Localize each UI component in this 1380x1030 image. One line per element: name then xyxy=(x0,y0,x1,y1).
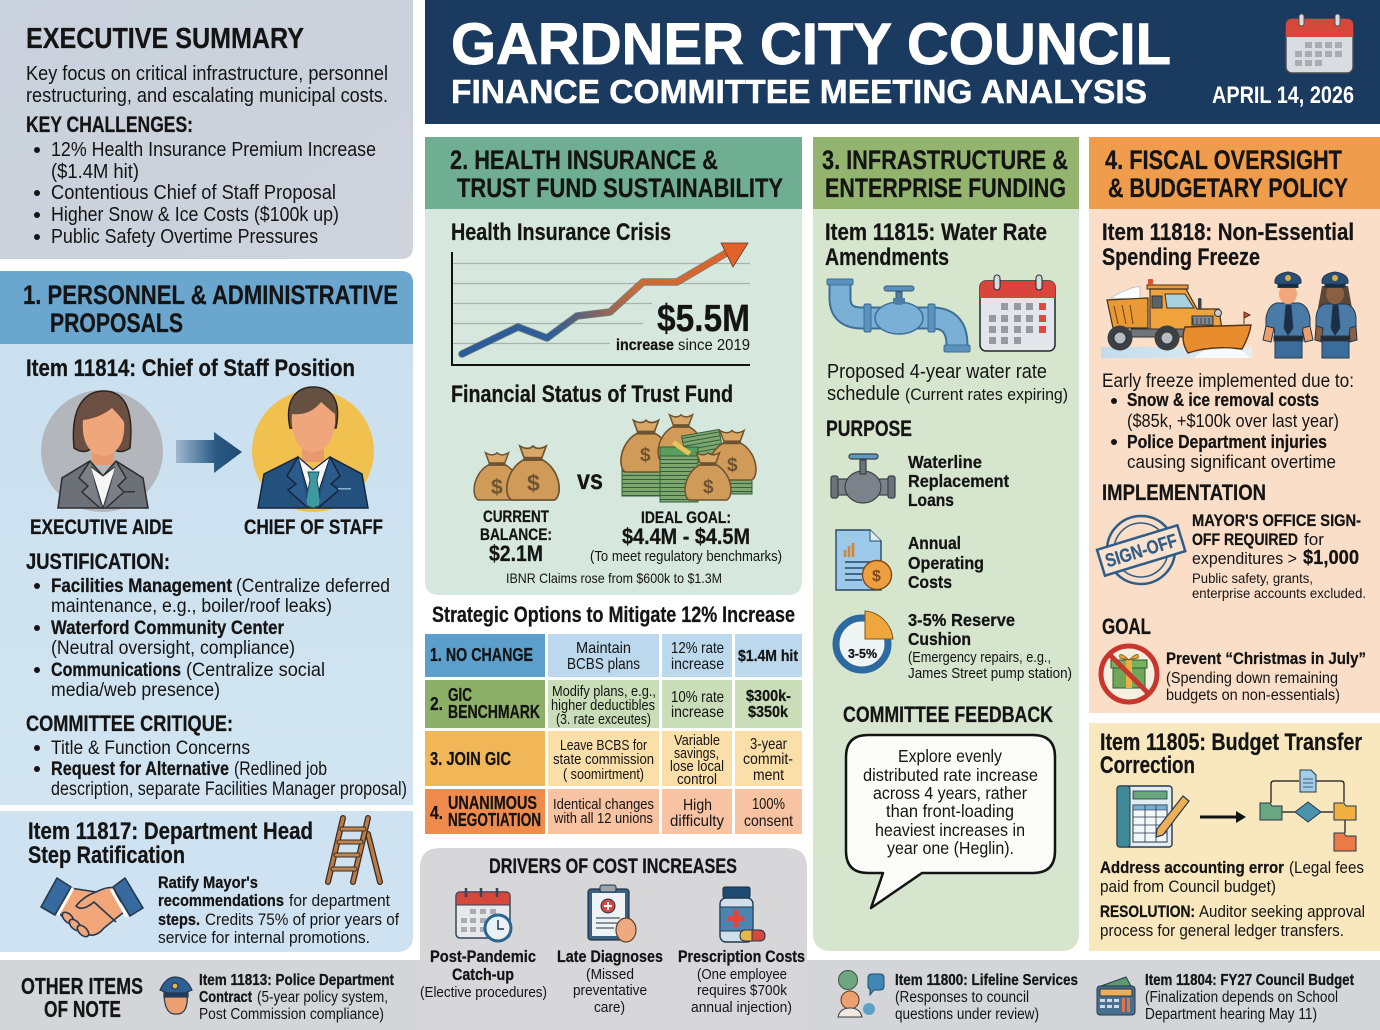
icon: snow plow truck xyxy=(1101,279,1252,358)
freeze reasons text xyxy=(1102,371,1354,472)
icon: goal money bags and cash: $ xyxy=(727,455,738,476)
row 1: no change: increase xyxy=(671,656,724,673)
critique list: Request for Alternative xyxy=(51,758,229,780)
freeze reasons text: Snow & ice removal costs xyxy=(1127,390,1319,410)
icon: sign-off stamp xyxy=(1097,516,1185,584)
label: ideal goal xyxy=(590,508,782,565)
icon: current money bags: $ xyxy=(491,476,503,499)
driver: prescription costs: annual injection) xyxy=(691,999,792,1016)
heading: item 11818 xyxy=(1102,219,1354,271)
label: current balance: BALANCE: xyxy=(480,525,552,544)
implementation text xyxy=(1192,511,1366,601)
purpose: annual operating costs: Costs xyxy=(908,572,952,592)
section header 1: 1. PERSONNEL & ADMINISTRATIVE xyxy=(23,280,398,310)
panel: 3 infrastructure and enterprise funding xyxy=(813,137,1079,951)
purpose: waterline replacement loans: Waterline xyxy=(908,452,982,472)
heading: other items of note: OTHER ITEMS xyxy=(21,973,143,999)
heading: goal: GOAL xyxy=(1102,614,1151,639)
icon: ledger and pencil xyxy=(1117,786,1189,847)
row 4: unanimous negotiation: NEGOTIATION xyxy=(448,810,541,830)
section header 3: 3. INFRASTRUCTURE & xyxy=(822,145,1068,175)
justification list: (Centralize deferred xyxy=(236,575,390,597)
row 2: GIC benchmark: GIC xyxy=(448,685,472,705)
row 1: no change: 12% rate xyxy=(671,640,724,657)
driver: late diagnoses xyxy=(557,948,663,1016)
subtitle: FINANCE COMMITTEE MEETING ANALYSIS xyxy=(451,73,1147,110)
critique list xyxy=(34,737,407,800)
resolution text: Auditor seeking approval xyxy=(1199,903,1365,921)
row 3: join GIC: control xyxy=(677,772,717,788)
icon: corrected workflow xyxy=(1260,770,1356,851)
other item 11813: (5-year policy system, xyxy=(257,989,388,1006)
driver: late diagnoses: care) xyxy=(594,999,625,1016)
row 2: GIC benchmark: BENCHMARK xyxy=(448,702,540,722)
chart callout caption: since 2019 xyxy=(678,337,750,354)
other item 11804: Department hearing May 11) xyxy=(1145,1006,1317,1023)
chart callout caption: increase xyxy=(616,337,674,354)
label: current balance: $2.1M xyxy=(489,541,543,566)
icon: goal money bags and cash: $ xyxy=(703,477,714,498)
icon: current money bags xyxy=(474,446,559,500)
description text: recommendations xyxy=(158,891,284,910)
row 3: join GIC: state commission xyxy=(553,751,654,768)
icon: sign-off stamp: SIGN-OFF xyxy=(1103,531,1180,572)
row 2: GIC benchmark: $350k xyxy=(748,704,788,721)
freeze reasons text: Police Department injuries xyxy=(1127,432,1327,452)
row 1: no change: 1. NO CHANGE xyxy=(430,645,533,665)
callout: committee feedback speech bubble: heaviest increases in xyxy=(875,820,1025,840)
icon: current money bags: $ xyxy=(527,470,540,496)
driver: late diagnoses: Late Diagnoses xyxy=(557,948,663,966)
icon: prescription bottle xyxy=(720,887,765,942)
purpose: annual operating costs: Operating xyxy=(908,553,984,573)
row 4: unanimous negotiation: High xyxy=(683,797,712,814)
summary text: Key focus on critical infrastructure, personnel xyxy=(26,63,388,85)
row 3: join GIC: Variable xyxy=(674,733,720,749)
heading: committee critique: COMMITTEE CRITIQUE: xyxy=(26,711,233,736)
implementation text: for xyxy=(1304,530,1324,549)
description text xyxy=(158,873,399,947)
heading: purpose: PURPOSE xyxy=(826,416,912,441)
label: current balance: CURRENT xyxy=(483,507,549,526)
other item 11813: Contract xyxy=(199,989,252,1006)
section header 1: PROPOSALS xyxy=(50,308,183,338)
heading: item 11815: Item 11815: Water Rate xyxy=(825,219,1047,246)
row 4: unanimous negotiation: difficulty xyxy=(670,813,724,830)
row 1: no change: $1.4M hit xyxy=(738,648,799,665)
critique list: description, separate Facilities Manager proposal) xyxy=(51,778,407,800)
heading: other items of note xyxy=(21,973,143,1022)
row 2: GIC benchmark: increase xyxy=(671,704,724,721)
icon: no gifts xyxy=(1101,646,1157,702)
water rate description: Proposed 4-year water rate xyxy=(827,361,1047,383)
driver: post-pandemic catch-up: Post-Pandemic xyxy=(430,948,536,966)
label: chief of staff: CHIEF OF STAFF xyxy=(244,516,383,539)
other item 11813 xyxy=(199,972,394,1023)
heading: item 11815 xyxy=(825,219,1047,271)
row 2: GIC benchmark: Modify plans, e.g., xyxy=(552,683,656,700)
line chart: premium increases xyxy=(452,243,750,365)
section header 2: TRUST FUND SUSTAINABILITY xyxy=(457,173,783,203)
purpose: annual operating costs xyxy=(908,533,984,592)
key challenges list: 12% Health Insurance Premium Increase xyxy=(51,139,376,161)
icon: lifeline services people chat xyxy=(838,970,884,1017)
driver: post-pandemic catch-up xyxy=(420,948,547,1001)
arrow: ledger to workflow xyxy=(1200,811,1246,823)
implementation text: expenditures > xyxy=(1192,549,1297,568)
accounting error text xyxy=(1100,859,1364,896)
comparison label: vs: vs xyxy=(577,464,603,495)
heading: health insurance crisis: Health Insurance Crisis xyxy=(451,219,671,246)
bottom strip: other items background xyxy=(0,960,1380,1030)
arrow: aide to chief xyxy=(176,432,242,473)
heading: item 11815: Amendments xyxy=(825,244,949,271)
driver: prescription costs: (One employee xyxy=(697,966,787,983)
row 2: GIC benchmark xyxy=(425,680,802,728)
description text: steps. xyxy=(158,910,200,929)
key challenges list: Higher Snow & Ice Costs ($100k up) xyxy=(51,204,339,226)
goal text: budgets on non-essentials) xyxy=(1166,687,1340,704)
implementation text: OFF REQUIRED xyxy=(1192,530,1298,549)
panel: drivers of cost increases xyxy=(420,848,807,1030)
heading: other items of note: OF NOTE xyxy=(44,996,121,1022)
key challenges list: Public Safety Overtime Pressures xyxy=(51,226,318,248)
heading: executive summary: EXECUTIVE SUMMARY xyxy=(26,23,304,55)
key challenges list xyxy=(34,139,376,248)
panel: 1 personnel and administrative proposals xyxy=(0,271,413,805)
section header 1 xyxy=(0,271,413,344)
purpose: waterline replacement loans: Loans xyxy=(908,490,954,510)
justification list: media/web presence) xyxy=(51,679,220,701)
justification list xyxy=(34,575,390,701)
purpose: annual operating costs: Annual xyxy=(908,533,961,553)
other item 11804 xyxy=(1145,972,1354,1023)
section header 2 xyxy=(425,137,802,209)
key challenges list: ($1.4M hit) xyxy=(51,161,139,183)
row 1: no change: BCBS plans xyxy=(567,656,640,673)
row 4: unanimous negotiation: with all 12 unions xyxy=(553,810,653,827)
chart callout caption xyxy=(616,337,750,354)
purpose: reserve cushion: (Emergency repairs, e.g., xyxy=(908,650,1051,666)
justification list: Communications xyxy=(51,659,181,681)
row 3: join GIC: 3-year xyxy=(750,736,788,753)
heading: strategic options: Strategic Options to Mitigate 12% Increase xyxy=(432,602,795,627)
description text: for department xyxy=(289,891,390,910)
callout: committee feedback speech bubble: distributed rate increase xyxy=(863,765,1038,785)
row 3: join GIC: ( soomirtment) xyxy=(563,766,644,783)
heading: key challenges: KEY CHALLENGES: xyxy=(26,112,193,137)
driver: late diagnoses: preventative xyxy=(573,982,647,999)
icon: calendar with clock xyxy=(456,888,511,941)
section header 4 xyxy=(1089,137,1380,209)
section header 3: ENTERPRISE FUNDING xyxy=(825,173,1066,203)
freeze reasons text: Early freeze implemented due to: xyxy=(1102,371,1354,392)
row 3: join GIC: savings, xyxy=(674,746,719,762)
purpose: reserve cushion: Cushion xyxy=(908,629,971,649)
driver: post-pandemic catch-up: Catch-up xyxy=(452,966,514,984)
other item 11804: (Finalization depends on School xyxy=(1145,989,1338,1006)
heading: committee feedback: COMMITTEE FEEDBACK xyxy=(843,702,1053,727)
purpose: reserve cushion: James Street pump station) xyxy=(908,666,1072,682)
icon: goal money bags and cash xyxy=(621,415,756,502)
icon: chief of staff xyxy=(252,387,374,512)
label: current balance xyxy=(480,507,552,566)
icon: executive aide xyxy=(41,390,163,512)
heading: drivers: DRIVERS OF COST INCREASES xyxy=(489,855,737,878)
row 3: join GIC xyxy=(425,731,802,788)
label: ideal goal: IDEAL GOAL: xyxy=(641,508,731,527)
driver: prescription costs: requires $700k xyxy=(697,982,787,999)
chart callout value: $5.5M xyxy=(657,298,750,340)
note: IBNR claims: IBNR Claims rose from $600k to $1.3M xyxy=(506,570,722,586)
heading: item 11805 xyxy=(1100,729,1362,779)
callout: committee feedback speech bubble xyxy=(846,735,1055,908)
row 2: GIC benchmark: higher deductibles xyxy=(551,697,655,714)
critique list: Title & Function Concerns xyxy=(51,737,250,759)
justification list: Waterford Community Center xyxy=(51,617,284,639)
description text: service for internal promotions. xyxy=(158,928,370,947)
resolution text: RESOLUTION: xyxy=(1100,903,1195,921)
meeting date: APRIL 14, 2026 xyxy=(1212,82,1354,109)
row 4: unanimous negotiation: 4. xyxy=(430,803,443,823)
driver: prescription costs: Prescription Costs xyxy=(678,948,805,966)
freeze reasons text: causing significant overtime xyxy=(1127,452,1336,472)
critique list: (Redlined job xyxy=(234,758,327,780)
other item 11800: Item 11800: Lifeline Services xyxy=(895,972,1078,989)
description text: Ratify Mayor's xyxy=(158,873,258,892)
description text: Credits 75% of prior years of xyxy=(205,910,399,929)
row 4: unanimous negotiation: consent xyxy=(744,813,793,830)
summary text xyxy=(26,63,388,107)
panel: item 11805 budget transfer correction xyxy=(1089,723,1380,951)
label: executive aide: EXECUTIVE AIDE xyxy=(30,516,173,539)
row 3: join GIC: Leave BCBS for xyxy=(560,737,647,754)
icon: valve xyxy=(831,454,895,503)
icon: reserve pie gauge: 3-5% xyxy=(848,647,877,661)
key challenges list: Contentious Chief of Staff Proposal xyxy=(51,182,336,204)
callout: committee feedback speech bubble: than front-loading xyxy=(886,801,1014,821)
water rate description xyxy=(827,361,1068,405)
row 4: unanimous negotiation: Identical changes xyxy=(553,796,654,813)
accounting error text: (Legal fees xyxy=(1289,859,1364,877)
justification list: Facilities Management xyxy=(51,575,232,597)
icon: calendar xyxy=(980,275,1055,351)
icon: calendar xyxy=(1286,14,1353,73)
panel: 4 fiscal oversight and budgetary policy xyxy=(1089,137,1380,713)
heading: item 11814: Item 11814: Chief of Staff Position xyxy=(26,355,355,382)
section header 2: 2. HEALTH INSURANCE & xyxy=(450,145,718,175)
row 1: no change xyxy=(425,634,802,677)
driver: prescription costs xyxy=(678,948,805,1016)
other item 11800: questions under review) xyxy=(895,1006,1039,1023)
purpose: reserve cushion xyxy=(908,610,1072,682)
row 4: unanimous negotiation xyxy=(425,789,802,834)
resolution text: process for general ledger transfers. xyxy=(1100,922,1344,940)
icon: water pipe xyxy=(827,279,970,352)
row 3: join GIC: ment xyxy=(753,767,784,784)
accounting error text: Address accounting error xyxy=(1100,859,1285,877)
label: ideal goal: $4.4M - $4.5M xyxy=(622,524,750,549)
summary text: restructuring, and escalating municipal costs. xyxy=(26,85,388,107)
heading: implementation: IMPLEMENTATION xyxy=(1102,480,1266,505)
purpose: waterline replacement loans xyxy=(908,452,1009,510)
row 4: unanimous negotiation: 100% xyxy=(752,796,785,813)
heading: justification: JUSTIFICATION: xyxy=(26,549,170,574)
row 1: no change: Maintain xyxy=(576,640,631,657)
justification list: (Neutral oversight, compliance) xyxy=(51,637,295,659)
section header 3 xyxy=(813,137,1079,209)
row 2: GIC benchmark: 2. xyxy=(430,694,443,714)
icon: reserve pie gauge xyxy=(836,611,893,670)
accounting error text: paid from Council budget) xyxy=(1100,878,1276,896)
heading: financial status of trust fund: Financial Status of Trust Fund xyxy=(451,381,733,408)
driver: post-pandemic catch-up: (Elective procedures) xyxy=(420,984,547,1001)
heading: item 11818: Spending Freeze xyxy=(1102,244,1260,271)
other item 11813: Item 11813: Police Department xyxy=(199,972,394,989)
driver: late diagnoses: (Missed xyxy=(586,966,634,983)
icon: clipboard xyxy=(588,885,636,942)
row 2: GIC benchmark: $300k- xyxy=(746,688,791,705)
implementation text: Public safety, grants, xyxy=(1192,570,1313,586)
panel: executive summary xyxy=(0,0,413,259)
row 2: GIC benchmark: 10% rate xyxy=(671,689,724,706)
title: GARDNER CITY COUNCIL xyxy=(451,12,1171,77)
icon: ladder xyxy=(328,818,380,882)
panel: item 11817 department head step ratification xyxy=(0,811,413,952)
icon: goal money bags and cash: $ xyxy=(640,445,651,466)
justification list: (Centralize social xyxy=(186,659,325,681)
callout: committee feedback speech bubble: year one (Heglin). xyxy=(887,838,1014,858)
heading: item 11817 xyxy=(28,818,313,869)
other item 11813: Post Commission compliance) xyxy=(199,1006,384,1023)
implementation text: enterprise accounts excluded. xyxy=(1192,585,1366,601)
resolution text xyxy=(1100,903,1365,940)
purpose: reserve cushion: 3-5% Reserve xyxy=(908,610,1015,630)
water rate description: schedule xyxy=(827,383,900,405)
row 3: join GIC: lose local xyxy=(670,759,724,775)
icon: police officer head xyxy=(160,977,192,1014)
goal text xyxy=(1166,649,1366,704)
icon: handshake xyxy=(41,878,143,939)
callout: committee feedback speech bubble: Explore evenly xyxy=(898,746,1002,766)
row 3: join GIC: commit- xyxy=(743,751,793,768)
implementation text: $1,000 xyxy=(1303,547,1359,569)
title banner xyxy=(425,0,1380,124)
icon: report with coin: $ xyxy=(872,568,881,585)
other item 11800 xyxy=(895,972,1078,1023)
heading: item 11817: Step Ratification xyxy=(28,842,185,869)
row 2: GIC benchmark: (3. rate exceutes) xyxy=(556,711,651,728)
heading: item 11817: Item 11817: Department Head xyxy=(28,818,313,845)
row 3: join GIC: 3. JOIN GIC xyxy=(430,749,511,769)
table: strategic options xyxy=(425,634,802,834)
goal text: (Spending down remaining xyxy=(1166,670,1338,687)
other item 11800: (Responses to council xyxy=(895,989,1029,1006)
icon: council budget calculator xyxy=(1097,977,1135,1015)
freeze reasons text: ($85k, +$100k over last year) xyxy=(1127,411,1339,431)
callout: committee feedback speech bubble: across 4 years, rather xyxy=(873,783,1027,803)
panel: 2 health insurance and trust fund sustainability xyxy=(425,137,802,595)
label: ideal goal: (To meet regulatory benchmarks) xyxy=(590,548,782,565)
icon: police officers xyxy=(1263,272,1357,358)
justification list: maintenance, e.g., boiler/roof leaks) xyxy=(51,595,332,617)
icon: report with coin xyxy=(836,530,892,590)
row 4: unanimous negotiation: UNANIMOUS xyxy=(448,793,537,813)
water rate description: (Current rates expiring) xyxy=(905,385,1068,404)
purpose: waterline replacement loans: Replacement xyxy=(908,471,1009,491)
heading: item 11805: Correction xyxy=(1100,752,1195,779)
